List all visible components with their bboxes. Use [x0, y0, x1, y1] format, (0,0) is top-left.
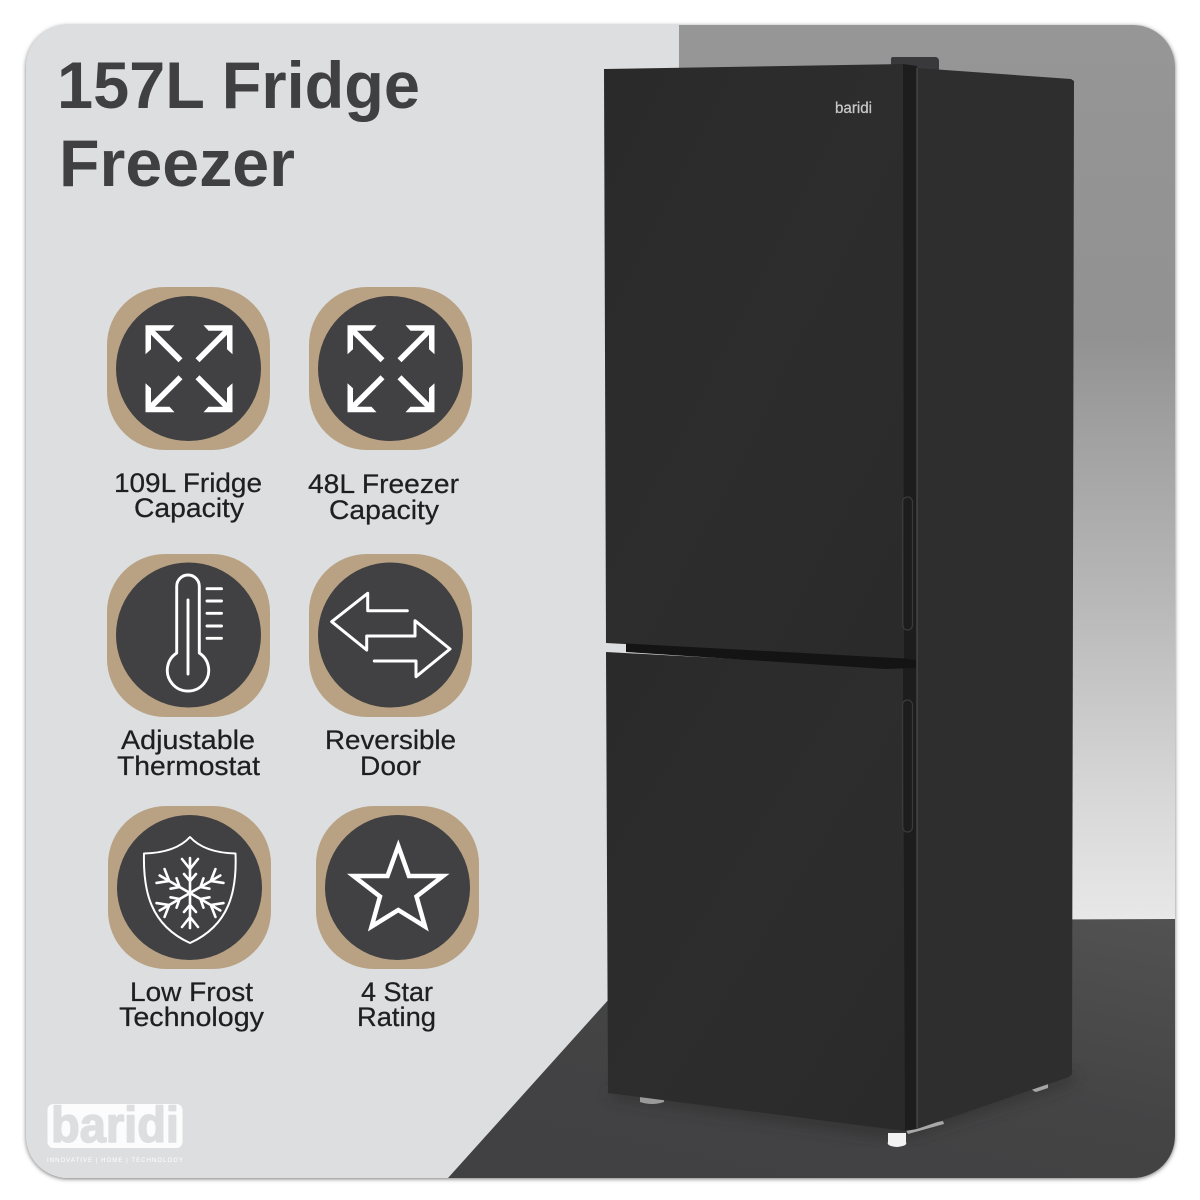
- title: [57, 48, 420, 200]
- fridge product: [604, 57, 1075, 1147]
- label: 48L Freezer Capacity: Capacity: [329, 495, 440, 525]
- icon: expand arrows: [146, 325, 232, 412]
- label: Low Frost Technology: Technology: [119, 1002, 265, 1032]
- floor: dark surface: [448, 919, 1175, 1178]
- fridge floor shadow: [612, 1070, 1075, 1140]
- feature: reversible door: [309, 554, 472, 781]
- feature: 48L freezer capacity: [308, 287, 472, 525]
- door logo: baridi: [835, 100, 872, 117]
- wall: grey gradient backdrop: [679, 25, 1175, 921]
- title: 157L Fridge: [57, 48, 420, 122]
- feature: 4 star rating: [316, 806, 479, 1032]
- label: Low Frost Technology: Low Frost: [130, 977, 254, 1007]
- feature: 109L fridge capacity: [107, 287, 270, 523]
- label: 48L Freezer Capacity: [308, 469, 459, 525]
- lower door: [606, 652, 905, 1131]
- logo: baridi brand mark: baridi: [51, 1097, 179, 1153]
- door handle recesses: [902, 497, 912, 832]
- icon: expand arrows: [348, 325, 434, 412]
- label: Reversible Door: Reversible: [325, 725, 456, 755]
- fridge side panel: [917, 68, 1074, 1129]
- label: 109L Fridge Capacity: [114, 468, 262, 523]
- label: Adjustable Thermostat: Adjustable: [121, 725, 255, 755]
- door gap: [626, 644, 916, 669]
- label: 4 Star Rating: Rating: [357, 1002, 436, 1032]
- label: Reversible Door: [325, 725, 456, 781]
- logo tagline: INNOVATIVE | HOME | TECHNOLOGY: [47, 1158, 183, 1164]
- label: 4 Star Rating: [357, 977, 436, 1032]
- label: 109L Fridge Capacity: Capacity: [134, 493, 245, 523]
- icon: snowflake shield: [144, 837, 236, 943]
- feature: low frost technology: [108, 806, 271, 1032]
- upper door: [604, 64, 904, 659]
- icon: star: [354, 846, 443, 926]
- label: Adjustable Thermostat: [117, 725, 261, 781]
- fridge feet: [640, 1082, 1048, 1147]
- centre door edge strip: [903, 64, 917, 1131]
- icon: reversing arrows: [332, 593, 450, 677]
- icon: thermometer: [167, 575, 222, 691]
- label: Adjustable Thermostat: Thermostat: [117, 751, 261, 781]
- label: 48L Freezer Capacity: 48L Freezer: [308, 469, 459, 499]
- label: Reversible Door: Door: [360, 751, 421, 781]
- door edge highlights: [916, 68, 918, 1129]
- title: Freezer: [59, 126, 295, 200]
- label: Low Frost Technology: [119, 977, 265, 1032]
- feature: adjustable thermostat: [107, 554, 270, 781]
- top hinge cap: [891, 57, 939, 70]
- label: 4 Star Rating: 4 Star: [361, 977, 433, 1007]
- label: 109L Fridge Capacity: 109L Fridge: [114, 468, 262, 498]
